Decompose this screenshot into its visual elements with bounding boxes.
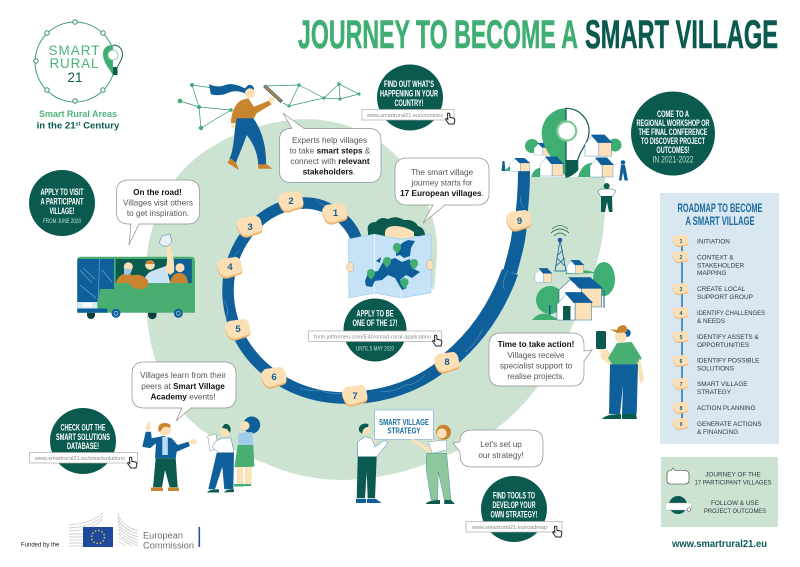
logo: Smart Rural 21: SMART [48,43,100,58]
panel: roadmap to become a smart village: 2 [680,255,683,261]
figure: man presenting [142,422,197,491]
speech bubble: Smart Village Academy: peers at Smart Village [141,382,225,391]
panel: roadmap to become a smart village: CREATE LOCAL [697,286,746,293]
badges 1 to 9 on the road: 5 [235,324,241,335]
funded by European Commission: Funded by the [21,542,60,548]
village with mast [532,226,615,320]
panel: roadmap to become a smart village: 3 [680,287,683,293]
panel: roadmap to become a smart village: A SMART VILLAGE [686,214,754,228]
network of stakeholders [178,82,361,130]
callout: regional workshop and final conference: THE FINAL CONFERENCE [638,127,708,138]
speech bubble: 17 European villages: 17 European villages. [400,189,484,198]
panel: legend: FOLLOW & USE [711,500,759,507]
badges 1 to 9 on the road: 3 [247,222,253,233]
panel: legend: JOURNEY OF THE [705,472,761,478]
callout: regional workshop and final conference: TO DISCOVER PROJECT [641,136,705,147]
callout: find out what's happening: FIND OUT WHAT'S [384,79,434,90]
callout: apply to visit: FROM JUNE 2020 [43,218,81,225]
panel: roadmap to become a smart village: STRATEGY [697,389,732,396]
panel: roadmap to become a smart village: INITIATION [697,238,730,246]
callout: find tools: OWN STRATEGY! [490,510,538,520]
logo: Smart Rural 21: in the 21 [37,120,76,132]
callout: regional workshop and final conference: REGIONAL WORKSHOP OR [636,118,710,129]
panel: roadmap to become a smart village [660,193,779,444]
badges 1 to 9 on the road: 2 [288,196,294,207]
figure: man with hands on hips [598,183,616,212]
panel: roadmap to become a smart village: ACTION PLANNING [697,405,756,412]
panel: roadmap to become a smart village: CONTEXT & [697,254,734,262]
figure: farmer with phone [596,325,644,419]
callout: apply to visit [29,170,95,236]
destination village with lightbulb pin [502,108,628,180]
logo: Smart Rural 21: st [76,122,81,128]
funded by European Commission [21,513,200,550]
badges 1 to 9 on the road: 9 [517,216,522,227]
badges 1 to 9 on the road: 1 [333,208,339,219]
funded by European Commission: European [143,530,183,540]
speech bubble: experts [280,113,381,182]
badges 1 to 9 on the road: 4 [227,262,233,273]
figure: woman holding strategy sign [410,425,455,504]
panel: roadmap to become a smart village: SUPPORT GROUP [697,294,753,301]
panel: roadmap to become a smart village: 5 [680,335,683,341]
callout: apply to be one of the 17: form.jotformeu.com/E40/smart-rural-application [314,334,431,340]
callout: regional workshop and final conference: OUTCOMES! [656,145,690,156]
speech bubble: experts: stakeholders. [303,168,355,176]
speech bubble: 17 European villages [395,158,489,223]
panel: roadmap to become a smart village: IDENTIFY POSSIBLE [697,358,759,364]
callout: smart solutions database: DATABASE! [67,441,99,452]
callout: apply to visit: A PARTICIPANT [40,196,84,208]
figure: man holding strategy sign [356,424,388,503]
speech bubble: experts: connect with relevant [290,157,370,166]
callout: apply to be one of the 17 [308,298,442,362]
callout: find out what's happening: HAPPENING IN YOUR [380,88,438,100]
sign: smart village strategy [374,410,434,440]
speech bubble: experts: to take smart steps & [290,146,371,156]
callout: find tools: DEVELOP YOUR [492,500,536,511]
logo: Smart Rural 21: Century [80,120,120,132]
callout: find tools: www.smartrural21.eu/roadmap [471,525,547,531]
callout: find out what's happening: www.smartrural21.eu/countries [366,113,443,119]
figure: woman in green skirt [234,416,260,486]
map of Europe held by a person [346,217,434,298]
callout: smart solutions database: SMART SOLUTIONS [56,432,110,443]
logo: Smart Rural 21: 21 [67,70,83,85]
badges 1 to 9 on the road: 6 [271,372,277,383]
figure: man with paper [207,424,234,492]
speech bubble: Smart Village Academy [132,362,236,421]
logo: Smart Rural 21: RURAL [50,56,99,71]
panel: roadmap to become a smart village: 7 [680,382,683,388]
speech bubble: 17 European villages: The smart village [411,168,474,177]
logo: Smart Rural 21: Smart Rural Areas [39,109,117,120]
speech bubble: Smart Village Academy: Villages learn from their [140,371,226,380]
callout: apply to visit: VILLAGE! [50,206,74,217]
panel: roadmap to become a smart village: 1 [680,239,683,245]
speech bubble: time to take action [489,333,592,386]
callout: regional workshop and final conference [631,92,715,176]
speech bubble: experts: Experts help villages [292,136,367,145]
panel: roadmap to become a smart village: 8 [680,406,683,412]
callout: smart solutions database: CHECK OUT THE [60,422,106,434]
panel: legend [661,457,778,527]
speech bubble: Smart Village Academy: Academy events! [150,392,216,402]
callout: apply to be one of the 17: APPLY TO BE [356,308,394,320]
panel: roadmap to become a smart village: & NEEDS [697,318,725,325]
speech bubble: on the road: to get inspiration. [127,209,189,218]
panel: roadmap to become a smart village: STAKEHOLDER [697,262,744,270]
panel: roadmap to become a smart village: 6 [680,359,683,365]
panel: roadmap to become a smart village: SOLUTIONS [697,366,734,372]
callout: apply to be one of the 17: UNTIL 5 MAY 2020 [356,346,394,352]
panel: legend: 17 PARTICIPANT VILLAGES [694,480,772,486]
callout: find out what's happening [362,64,455,130]
callout: apply to visit: APPLY TO VISIT [40,187,84,198]
callout: find tools [466,476,562,542]
road: journey path [224,171,524,398]
panel: roadmap to become a smart village: 9 [680,422,683,428]
speech bubble: let's set up our strategy: our strategy! [478,451,524,460]
panel: roadmap to become a smart village: & FINANCING [697,429,738,436]
panel: roadmap to become a smart village: IDENTIFY ASSETS & [697,334,759,341]
callout: find out what's happening: COUNTRY! [394,98,424,109]
callout: find tools: FIND TOOLS TO [493,490,535,502]
panel: roadmap to become a smart village: 4 [680,311,683,317]
sign: smart village strategy: SMART VILLAGE [379,418,429,427]
speech bubble: 17 European villages: journey starts for [411,178,473,188]
sign: smart village strategy: STRATEGY [388,426,421,436]
badges 1 to 9 on the road [217,191,531,407]
callout: apply to be one of the 17: ONE OF THE 17! [352,318,398,329]
bus with villagers [77,234,195,319]
callout: regional workshop and final conference: IN 2021-2022 [652,154,694,166]
website link: www.smartrural21.eu [671,538,767,550]
speech bubble: on the road [116,180,200,245]
speech bubble: time to take action: realise projects. [507,372,565,381]
badges 1 to 9 on the road: 8 [444,357,450,368]
figure: woman drawing network [209,84,282,170]
title: JOURNEY TO BECOME A [298,13,578,57]
speech bubble: let's set up our strategy: Let's set up [480,440,522,449]
badges 1 to 9 on the road: 7 [352,391,358,402]
speech bubble: on the road: Villages visit others [123,198,193,208]
speech bubble: let's set up our strategy [453,430,543,467]
speech bubble: on the road: On the road! [133,188,182,197]
speech bubble: time to take action: specialist support to [500,362,573,370]
panel: roadmap to become a smart village: SMART VILLAGE [697,381,748,388]
panel: legend: PROJECT OUTCOMES [704,508,766,515]
panel: roadmap to become a smart village: GENERATE ACTIONS [697,421,762,428]
panel: roadmap to become a smart village: OPPORTUNITIES [697,342,749,349]
callout: smart solutions database [30,408,138,474]
funded by European Commission: Commission [143,540,194,550]
panel: roadmap to become a smart village: IDENTIFY CHALLENGES [697,310,765,317]
logo: Smart Rural 21 [34,20,122,131]
panel: roadmap to become a smart village: MAPPING [697,270,727,277]
callout: smart solutions database: www.smartrural21.eu/smartsolutions [34,456,125,462]
speech bubble: time to take action: Villages receive [507,351,565,360]
green journey background area [146,119,605,480]
speech bubble: time to take action: Time to take action! [498,340,574,349]
callout: regional workshop and final conference: COME TO A [657,109,689,120]
